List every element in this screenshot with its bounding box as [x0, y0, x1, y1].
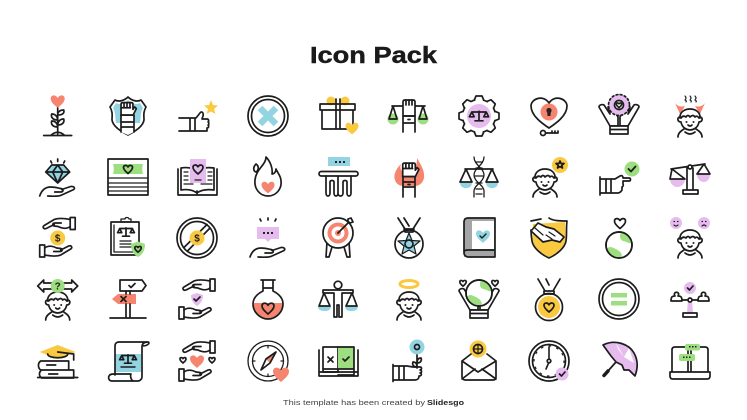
- icon: confused boy with arrows: [38, 279, 78, 320]
- icon: hands with dollar coin: [40, 218, 75, 257]
- icon: balance held by hand: [388, 100, 428, 132]
- icon: fist with flames: [394, 158, 424, 197]
- icon: flame with heart: [254, 157, 281, 196]
- icon: hands protecting shield: [179, 279, 215, 319]
- icon: no money sign: $: [194, 234, 200, 244]
- icon: human scale: [318, 281, 358, 317]
- icon: hands with dollar coin: $: [55, 234, 61, 244]
- title: Icon Pack: [310, 42, 437, 68]
- icon: envelope with globe: [462, 340, 496, 380]
- icon: speech bubble over hand: [250, 218, 285, 257]
- icon: equals circle: [599, 279, 639, 319]
- icon: shield with fist: [110, 97, 146, 135]
- icon: hands holding flower: [599, 94, 639, 134]
- footer credit: This template has been created by: [283, 398, 425, 407]
- icon: star medal: [395, 218, 423, 258]
- icon: clock with check: [529, 341, 569, 381]
- icon: open book with cross and check: [319, 347, 358, 376]
- icon: hands holding globe: [459, 280, 499, 318]
- icon: target with arrow: [323, 218, 353, 257]
- icon: book with heart: [464, 218, 495, 257]
- icon: boy with emojis: [670, 217, 710, 258]
- icon: flower with heart: [44, 95, 72, 136]
- icon: graduation cap on books: [38, 345, 78, 378]
- icon: thumbs up with star: [179, 100, 218, 131]
- icon: direction signpost: [110, 280, 146, 318]
- icon: angry boy with horns: [675, 96, 705, 137]
- icon: balance with people: [671, 282, 709, 317]
- icon: compass with heart: [248, 341, 289, 382]
- icon: angel boy with halo: [397, 280, 421, 320]
- icon: open book with heart: [178, 159, 217, 195]
- icon: hands with hearts: [179, 341, 215, 381]
- footer credit: [283, 398, 464, 407]
- icon: hand holding flower: [393, 340, 424, 382]
- icon: scale with purple pans: [670, 164, 710, 194]
- icon: diamond in hand: [40, 159, 74, 196]
- icon: gift box: [320, 96, 358, 134]
- icon: heart medal: [536, 279, 562, 320]
- icon: table with speech bubble: [319, 157, 358, 196]
- icon: flask with heart: [253, 280, 283, 319]
- icon: no money sign: [177, 218, 217, 258]
- icon: stack of cash: [108, 159, 148, 195]
- icon: DNA with scales: [460, 157, 498, 197]
- footer credit: Slidesgo: [427, 398, 464, 407]
- icon: laptop with chat bubbles: [670, 344, 710, 379]
- icon: scroll with scale: [109, 342, 149, 381]
- icon: gear with scale: [459, 96, 499, 136]
- icon: clipboard with scale: [111, 218, 145, 257]
- icon: circle with cross: [248, 96, 288, 136]
- icon: boy with star badge: [533, 157, 568, 197]
- icon: handshake shield: [531, 218, 567, 258]
- icon: pointing hand with check: [600, 162, 640, 195]
- icon: umbrella: [603, 342, 637, 376]
- icon: globe with heart: [606, 219, 632, 258]
- icon: confused boy with arrows: ?: [55, 282, 61, 292]
- icon: heart lock with key: [531, 98, 567, 136]
